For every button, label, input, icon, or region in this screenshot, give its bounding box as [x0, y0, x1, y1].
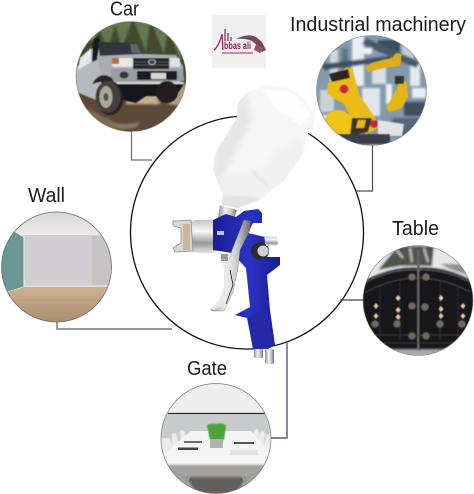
windshield — [98, 42, 142, 58]
truck side — [76, 48, 104, 100]
place settings — [184, 441, 202, 443]
logo: bbas ali — [224, 41, 251, 52]
photo: car — [76, 21, 186, 132]
photo: table — [160, 382, 272, 494]
photo: wall — [0, 211, 113, 323]
heading: Table: Table — [392, 218, 439, 240]
plant — [207, 423, 226, 440]
bottom fittings — [254, 349, 263, 358]
table top — [178, 431, 259, 446]
photo border: car — [76, 22, 186, 132]
heading: Industrial machinery: Industrial machinery — [290, 14, 466, 36]
spray gun — [173, 80, 320, 364]
snorkel — [92, 36, 100, 62]
bumper — [111, 69, 184, 83]
connector: car — [132, 131, 152, 160]
connector: table — [340, 299, 363, 301]
cable base — [330, 134, 390, 144]
photo: industrial machinery — [316, 35, 428, 147]
tool piece — [378, 120, 404, 136]
rear needle cap — [264, 236, 278, 246]
chairs — [162, 428, 270, 444]
connector: gate — [271, 343, 287, 438]
second robot — [386, 80, 408, 112]
heading: Wall: Wall — [28, 185, 65, 207]
big robot arm — [327, 68, 378, 134]
hood and front — [97, 54, 184, 84]
under truck — [118, 84, 184, 103]
gun head — [190, 220, 218, 253]
grille — [133, 58, 169, 69]
front wheel — [101, 81, 124, 116]
fleur-de-lis — [374, 295, 466, 320]
teal wall — [2, 232, 24, 292]
photo border: industrial machinery — [316, 36, 426, 146]
cup collar — [218, 205, 237, 222]
photo border: table — [161, 384, 271, 494]
robot joint — [350, 118, 372, 136]
photo: iron gate (labelled Table) — [362, 245, 474, 357]
wheel arch — [92, 74, 114, 84]
trigger blade — [210, 254, 231, 310]
logo — [212, 15, 266, 68]
heading: Gate: Gate — [187, 358, 227, 380]
connector: wall — [57, 322, 172, 329]
rosettes — [371, 273, 466, 340]
blue body — [213, 209, 280, 349]
headlights — [112, 58, 133, 67]
upper robot — [365, 53, 402, 72]
rear wheel — [156, 81, 178, 103]
photo border: wall — [2, 212, 112, 322]
paint cup — [213, 85, 315, 208]
photo border: iron gate — [363, 246, 473, 356]
robot base — [325, 110, 362, 136]
trigger lever — [210, 220, 250, 311]
floor — [8, 287, 108, 322]
adjustment knob — [251, 242, 269, 260]
connector: industrial machinery — [356, 145, 372, 191]
large central circle — [130, 116, 364, 349]
robot wrist — [329, 69, 350, 82]
